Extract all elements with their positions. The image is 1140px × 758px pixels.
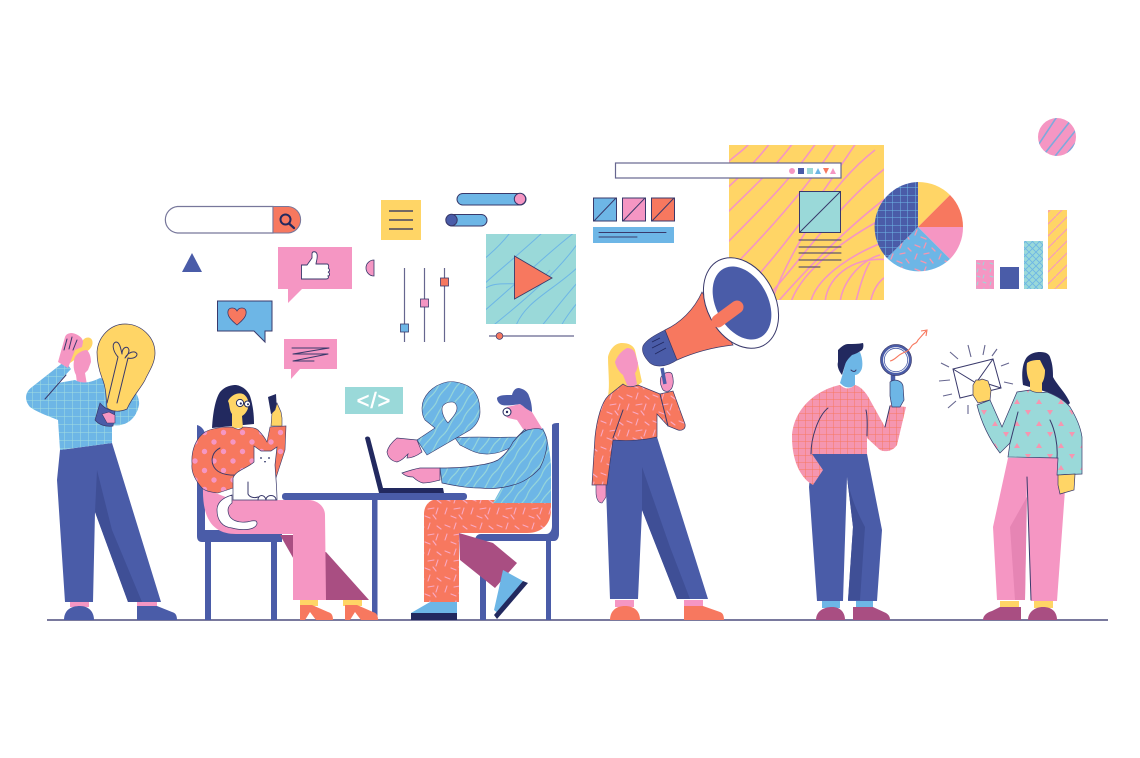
ground line xyxy=(47,619,1108,621)
equaliser sliders xyxy=(400,268,448,342)
phone and hand xyxy=(268,394,282,426)
pointing hand xyxy=(402,468,440,483)
twisted upper arm xyxy=(455,429,530,454)
arm loop xyxy=(417,382,480,455)
man with magnifier xyxy=(792,330,927,620)
magnifier xyxy=(880,344,912,402)
bell rim xyxy=(688,245,794,361)
sweater xyxy=(977,390,1082,475)
seated man at laptop xyxy=(387,382,551,620)
yellow menu note xyxy=(381,200,421,240)
light bulb xyxy=(97,324,155,411)
head xyxy=(497,388,543,433)
table with laptop xyxy=(282,436,467,620)
half circle xyxy=(366,260,374,276)
head xyxy=(615,348,638,386)
torso xyxy=(493,428,551,503)
toggle switches xyxy=(446,193,526,226)
face xyxy=(228,393,250,428)
lower hand xyxy=(1058,474,1075,494)
hair xyxy=(70,338,93,363)
shoes xyxy=(816,601,890,620)
woman with megaphone xyxy=(592,343,724,620)
search bar xyxy=(165,206,301,233)
shoes xyxy=(610,600,724,620)
hand holding bulb xyxy=(95,403,115,426)
shoes xyxy=(983,601,1057,620)
bell inner xyxy=(701,256,783,350)
comment speech bubble xyxy=(284,339,337,379)
trend arrow xyxy=(890,330,927,361)
ankles and shoes xyxy=(64,602,177,620)
hand xyxy=(890,380,904,407)
megaphone xyxy=(642,245,794,366)
trousers xyxy=(993,458,1065,601)
sweater xyxy=(26,361,139,450)
back leg xyxy=(280,535,369,600)
navy triangle xyxy=(182,253,202,272)
left chair xyxy=(197,425,282,620)
upper hand xyxy=(387,438,422,462)
striped ball xyxy=(1038,118,1076,156)
three colour swatches with caption bar xyxy=(593,198,674,243)
trousers xyxy=(424,500,551,602)
yellow document panel xyxy=(729,145,884,300)
seated woman with cat xyxy=(192,385,378,620)
bar chart xyxy=(976,210,1067,289)
raised hand with grip xyxy=(660,368,673,391)
ankles and shoes xyxy=(300,600,378,620)
trousers xyxy=(57,443,161,602)
envelope rays xyxy=(939,345,1013,414)
pie chart xyxy=(875,182,963,271)
shoes xyxy=(411,570,528,620)
handle end xyxy=(642,330,677,366)
hair xyxy=(212,385,254,428)
hair xyxy=(1022,352,1070,406)
right chair xyxy=(475,423,559,620)
driver xyxy=(718,307,737,321)
lower hand xyxy=(596,485,606,503)
trousers xyxy=(809,454,882,601)
code tag box xyxy=(345,387,403,414)
sweater xyxy=(592,384,685,485)
cone xyxy=(665,292,733,360)
like speech bubble xyxy=(278,247,352,303)
person with light bulb xyxy=(26,324,177,620)
hair xyxy=(608,343,642,396)
heart speech bubble xyxy=(218,301,272,342)
browser address bar xyxy=(616,163,841,178)
sweater xyxy=(792,385,906,485)
head xyxy=(838,343,863,387)
envelope xyxy=(953,359,1001,398)
trousers xyxy=(203,488,326,600)
trousers xyxy=(606,437,708,599)
hand holding envelope xyxy=(973,379,991,403)
woman with envelope xyxy=(939,345,1082,620)
lower arm xyxy=(440,428,547,489)
cat xyxy=(217,446,277,530)
video player xyxy=(486,234,576,340)
back leg xyxy=(459,533,517,588)
head xyxy=(1027,360,1045,394)
code tag box: </> xyxy=(357,388,391,413)
head and neck xyxy=(74,350,91,387)
sweater xyxy=(192,426,286,493)
image placeholder with text lines xyxy=(799,192,841,267)
raised hand xyxy=(58,333,83,368)
